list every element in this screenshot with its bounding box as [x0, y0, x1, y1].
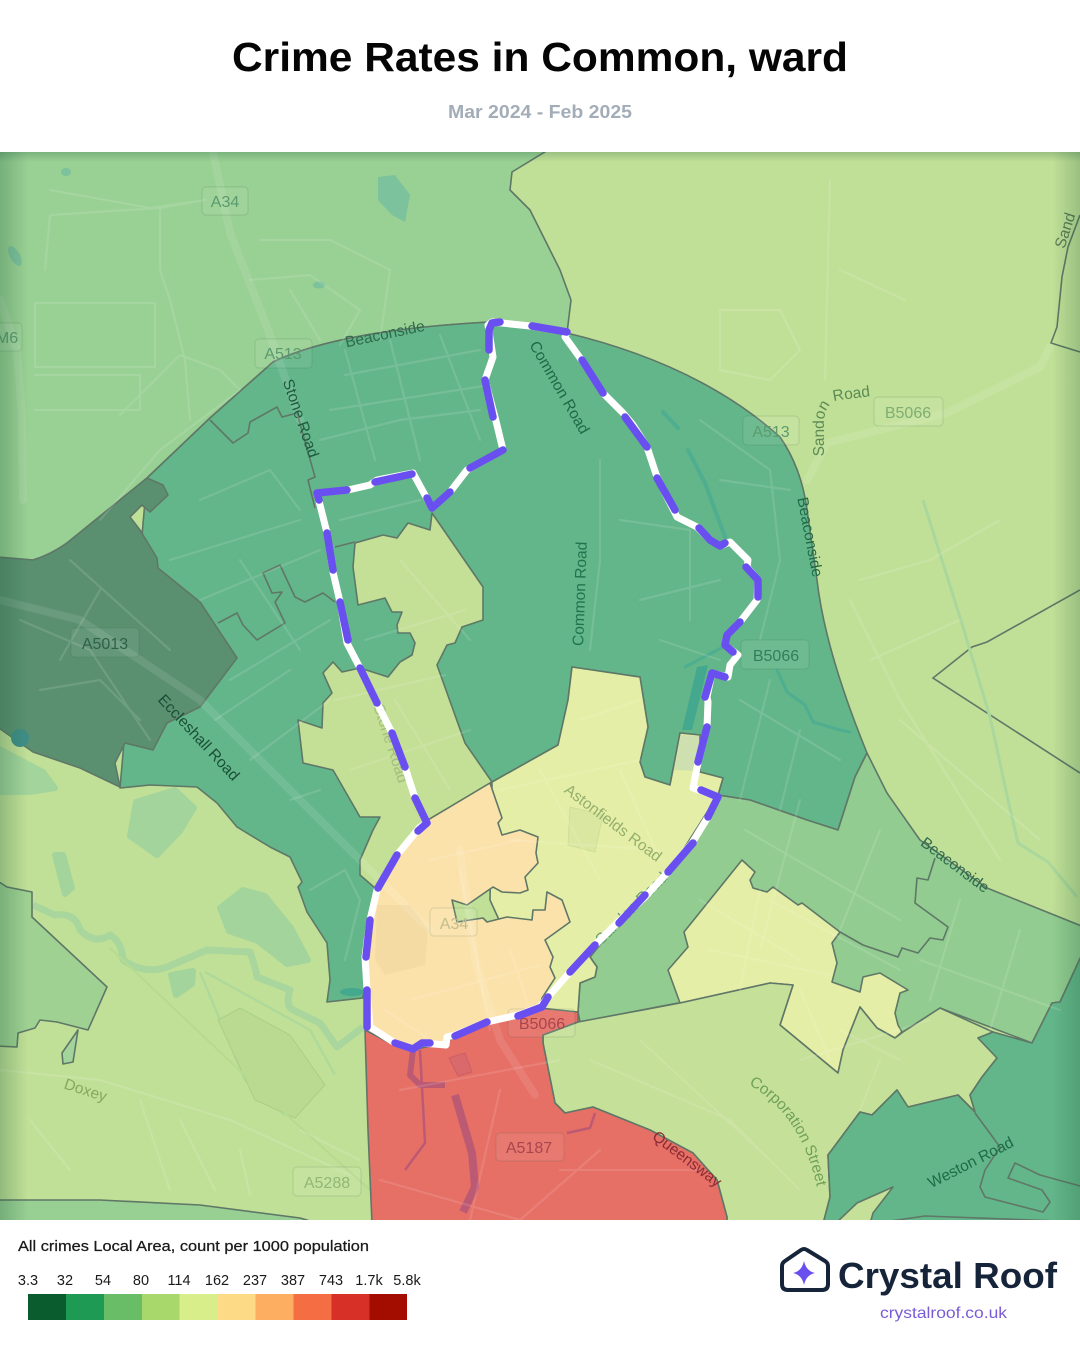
road labels: Stone Road — [279, 377, 322, 460]
legend scale values: 3.3 — [18, 1273, 38, 1289]
road labels: Stone Road — [370, 702, 411, 785]
road labels: Beaconside — [793, 496, 825, 579]
ward: town centre, orange — [365, 783, 570, 1048]
road shield: B5066 centre: B5066 — [753, 648, 799, 665]
ward: north-west — [0, 150, 571, 560]
road labels: Sand — [1052, 211, 1079, 250]
legend scale values: 54 — [95, 1273, 111, 1289]
website url: crystalroof.co.uk — [880, 1305, 1008, 1322]
ward: east, mid green — [578, 753, 1080, 1043]
road labels: Doxey — [62, 1076, 109, 1106]
legend scale values: 5.8k — [393, 1273, 421, 1289]
road labels: Common Road — [570, 541, 591, 646]
ward: south-west — [0, 880, 107, 1047]
road labels: Sandon Road — [812, 385, 870, 456]
road shield: M6 — [0, 323, 22, 351]
road shield: A513 east: A513 — [752, 424, 790, 441]
map edge shading — [0, 152, 1080, 1220]
road labels: Beaconside — [344, 318, 426, 351]
road shield: A5288 — [293, 1167, 361, 1196]
brand logo — [782, 1249, 1058, 1322]
road labels: Corporation Street — [751, 1078, 826, 1186]
ward: Common, main band — [120, 322, 867, 1002]
road shield: A34 north: A34 — [211, 194, 239, 211]
legend — [18, 1239, 421, 1320]
road labels: Beaconside — [917, 834, 992, 897]
road labels: Common Road — [525, 338, 592, 437]
canal north-east — [11, 412, 850, 996]
road shield: B5066 north-east: B5066 — [885, 405, 931, 422]
ward: Astonfields, pale yellow — [490, 667, 723, 1012]
choropleth map — [0, 152, 1080, 1220]
legend title: All crimes Local Area, count per 1000 population — [18, 1239, 369, 1255]
road shield: A34 north — [202, 187, 248, 215]
road labels: Eccleshall Road — [154, 691, 242, 784]
legend scale values: 114 — [167, 1273, 191, 1289]
subtitle: date range: Mar 2024 - Feb 2025 — [448, 102, 632, 122]
railway line east — [923, 500, 1077, 897]
water: lakes and river south-west — [0, 748, 370, 1190]
road shield: A5288: A5288 — [304, 1175, 350, 1192]
ward: darkest, far west — [0, 478, 237, 787]
road shield: B5066 centre — [741, 640, 809, 669]
ward: yellow-green south-east — [543, 983, 997, 1224]
road shield: B5066 north-east — [874, 397, 943, 426]
Common ward boundary: white line with purple dashes — [317, 322, 758, 1049]
road labels: Astonfields Road — [561, 781, 665, 865]
road shield: B5066 south — [508, 1009, 575, 1037]
road labels: Queensway — [649, 1128, 725, 1191]
main roads — [0, 152, 1050, 1095]
road shield: A5187: A5187 — [506, 1140, 552, 1157]
legend scale values: 1.7k — [355, 1273, 383, 1289]
road shield: A513 east — [743, 416, 799, 445]
legend scale values: 743 — [319, 1273, 343, 1289]
legend scale values: 80 — [133, 1273, 149, 1289]
legend scale values — [18, 1273, 421, 1289]
ward boundaries inside green band — [210, 407, 355, 640]
road labels: Weston Road — [925, 1134, 1017, 1192]
street network — [0, 180, 1060, 1220]
base area: north-east and south-west wards — [0, 152, 1080, 1220]
road shield: A5013 — [71, 628, 139, 657]
ward: highest rate, red — [365, 1008, 727, 1224]
ward: yellow-green lobe around Stone Road — [298, 513, 492, 888]
canal through red ward — [405, 1050, 595, 1212]
road shield: A34 town centre: A34 — [440, 916, 468, 933]
water: lakes north-west — [5, 168, 410, 288]
road shield: A513 west — [255, 339, 312, 368]
ward: dark green south-east — [823, 950, 1080, 1224]
legend scale values: 162 — [205, 1273, 229, 1289]
legend scale values: 387 — [281, 1273, 305, 1289]
icon: house with star — [782, 1249, 828, 1290]
road shield: A34 town centre — [430, 908, 477, 936]
road shield: A513 west: A513 — [264, 346, 302, 363]
legend scale values: 32 — [57, 1273, 73, 1289]
ward: north-east outline — [933, 215, 1080, 773]
road shield: A5187 — [496, 1133, 564, 1161]
legend scale values: 237 — [243, 1273, 267, 1289]
road shield: B5066 south: B5066 — [519, 1016, 565, 1033]
title: Crime Rates in Common, ward — [232, 34, 848, 80]
legend colour bar — [28, 1294, 407, 1320]
wordmark: Crystal Roof — [838, 1255, 1058, 1296]
road labels: Sandon Road — [592, 869, 671, 948]
road shield: A5013: A5013 — [82, 636, 128, 653]
ward: pale yellow patch east — [668, 860, 908, 1073]
road labels — [64, 212, 1076, 1187]
